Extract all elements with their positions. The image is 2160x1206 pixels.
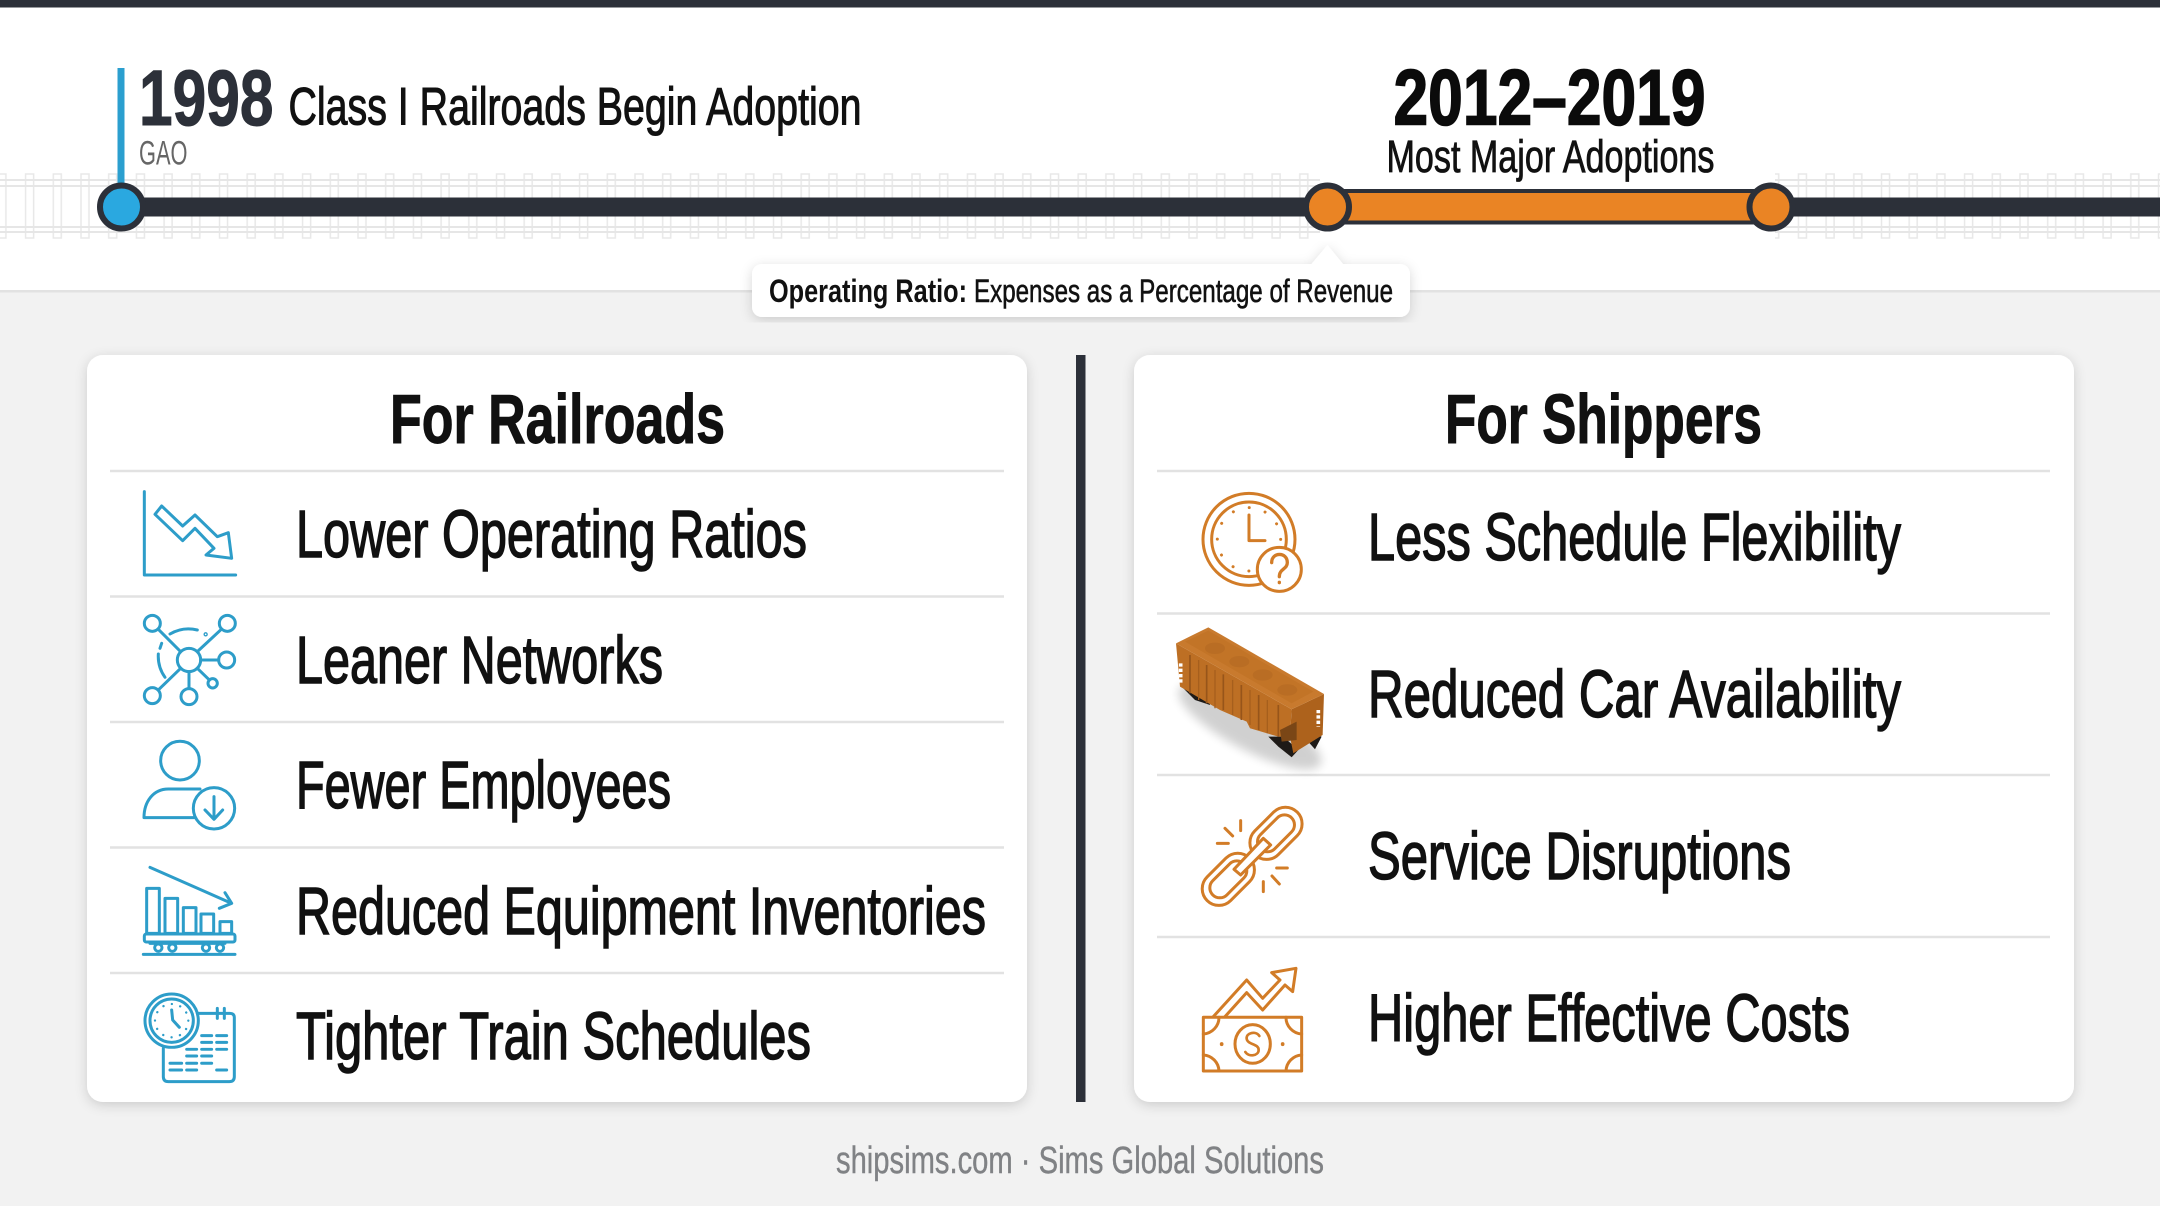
icon: falling chart xyxy=(144,492,236,575)
callout: operating ratio xyxy=(752,245,1410,317)
header band xyxy=(0,7,2160,291)
1998 marker dot xyxy=(100,186,143,228)
2012-2019 orange range bar xyxy=(1328,191,1771,222)
icon: hopper railcar xyxy=(1168,627,1332,785)
row text: leaner networks: Leaner Networks xyxy=(296,623,663,698)
icon: network xyxy=(144,615,235,705)
row text: service disruptions: Service Disruptions xyxy=(1368,819,1791,894)
row text: reduced equipment inventories: Reduced Equipment Inventories xyxy=(296,874,986,949)
row text: less schedule flexibility: Less Schedule Flexibility xyxy=(1368,500,1901,575)
callout: operating ratio: Expenses as a Percentage of Revenue xyxy=(974,273,1393,309)
top bar xyxy=(0,0,2160,8)
icon: clock with question mark xyxy=(1203,493,1301,591)
row text: lower operating ratios: Lower Operating Ratios xyxy=(296,497,807,572)
2012-2019 range: 2012–2019 xyxy=(1394,52,1706,142)
row text: fewer employees: Fewer Employees xyxy=(296,748,671,823)
row text: reduced car availability: Reduced Car Availability xyxy=(1368,657,1901,732)
1998 year: 1998 xyxy=(139,53,274,142)
1998 marker stem xyxy=(118,68,124,193)
icon: person with down arrow xyxy=(144,741,235,829)
2019 marker dot xyxy=(1750,186,1792,228)
center divider xyxy=(1076,355,1086,1102)
callout: operating ratio: Operating Ratio: xyxy=(769,273,967,309)
2012-2019 description: Most Major Adoptions xyxy=(1386,131,1714,182)
heading: For Shippers xyxy=(1445,380,1762,458)
heading: For Railroads xyxy=(390,380,725,458)
panel: for railroads xyxy=(87,355,1027,1102)
row text: higher effective costs: Higher Effective Costs xyxy=(1368,981,1850,1056)
footer: shipsims.com · Sims Global Solutions xyxy=(836,1140,1324,1182)
icon: broken chain xyxy=(1195,800,1309,912)
icon: clock and calendar xyxy=(145,994,234,1082)
icon: money with rising arrow xyxy=(1203,968,1302,1071)
row text: tighter train schedules: Tighter Train Schedules xyxy=(296,999,811,1074)
panel: for shippers xyxy=(1134,355,2074,1102)
railway track background xyxy=(0,173,2160,239)
icon: shrinking bars on railcar xyxy=(143,867,235,954)
1998 description: Class I Railroads Begin Adoption xyxy=(288,78,862,136)
2012 marker dot xyxy=(1306,186,1349,228)
timeline line xyxy=(121,198,2160,216)
source GAO: GAO xyxy=(139,134,188,172)
